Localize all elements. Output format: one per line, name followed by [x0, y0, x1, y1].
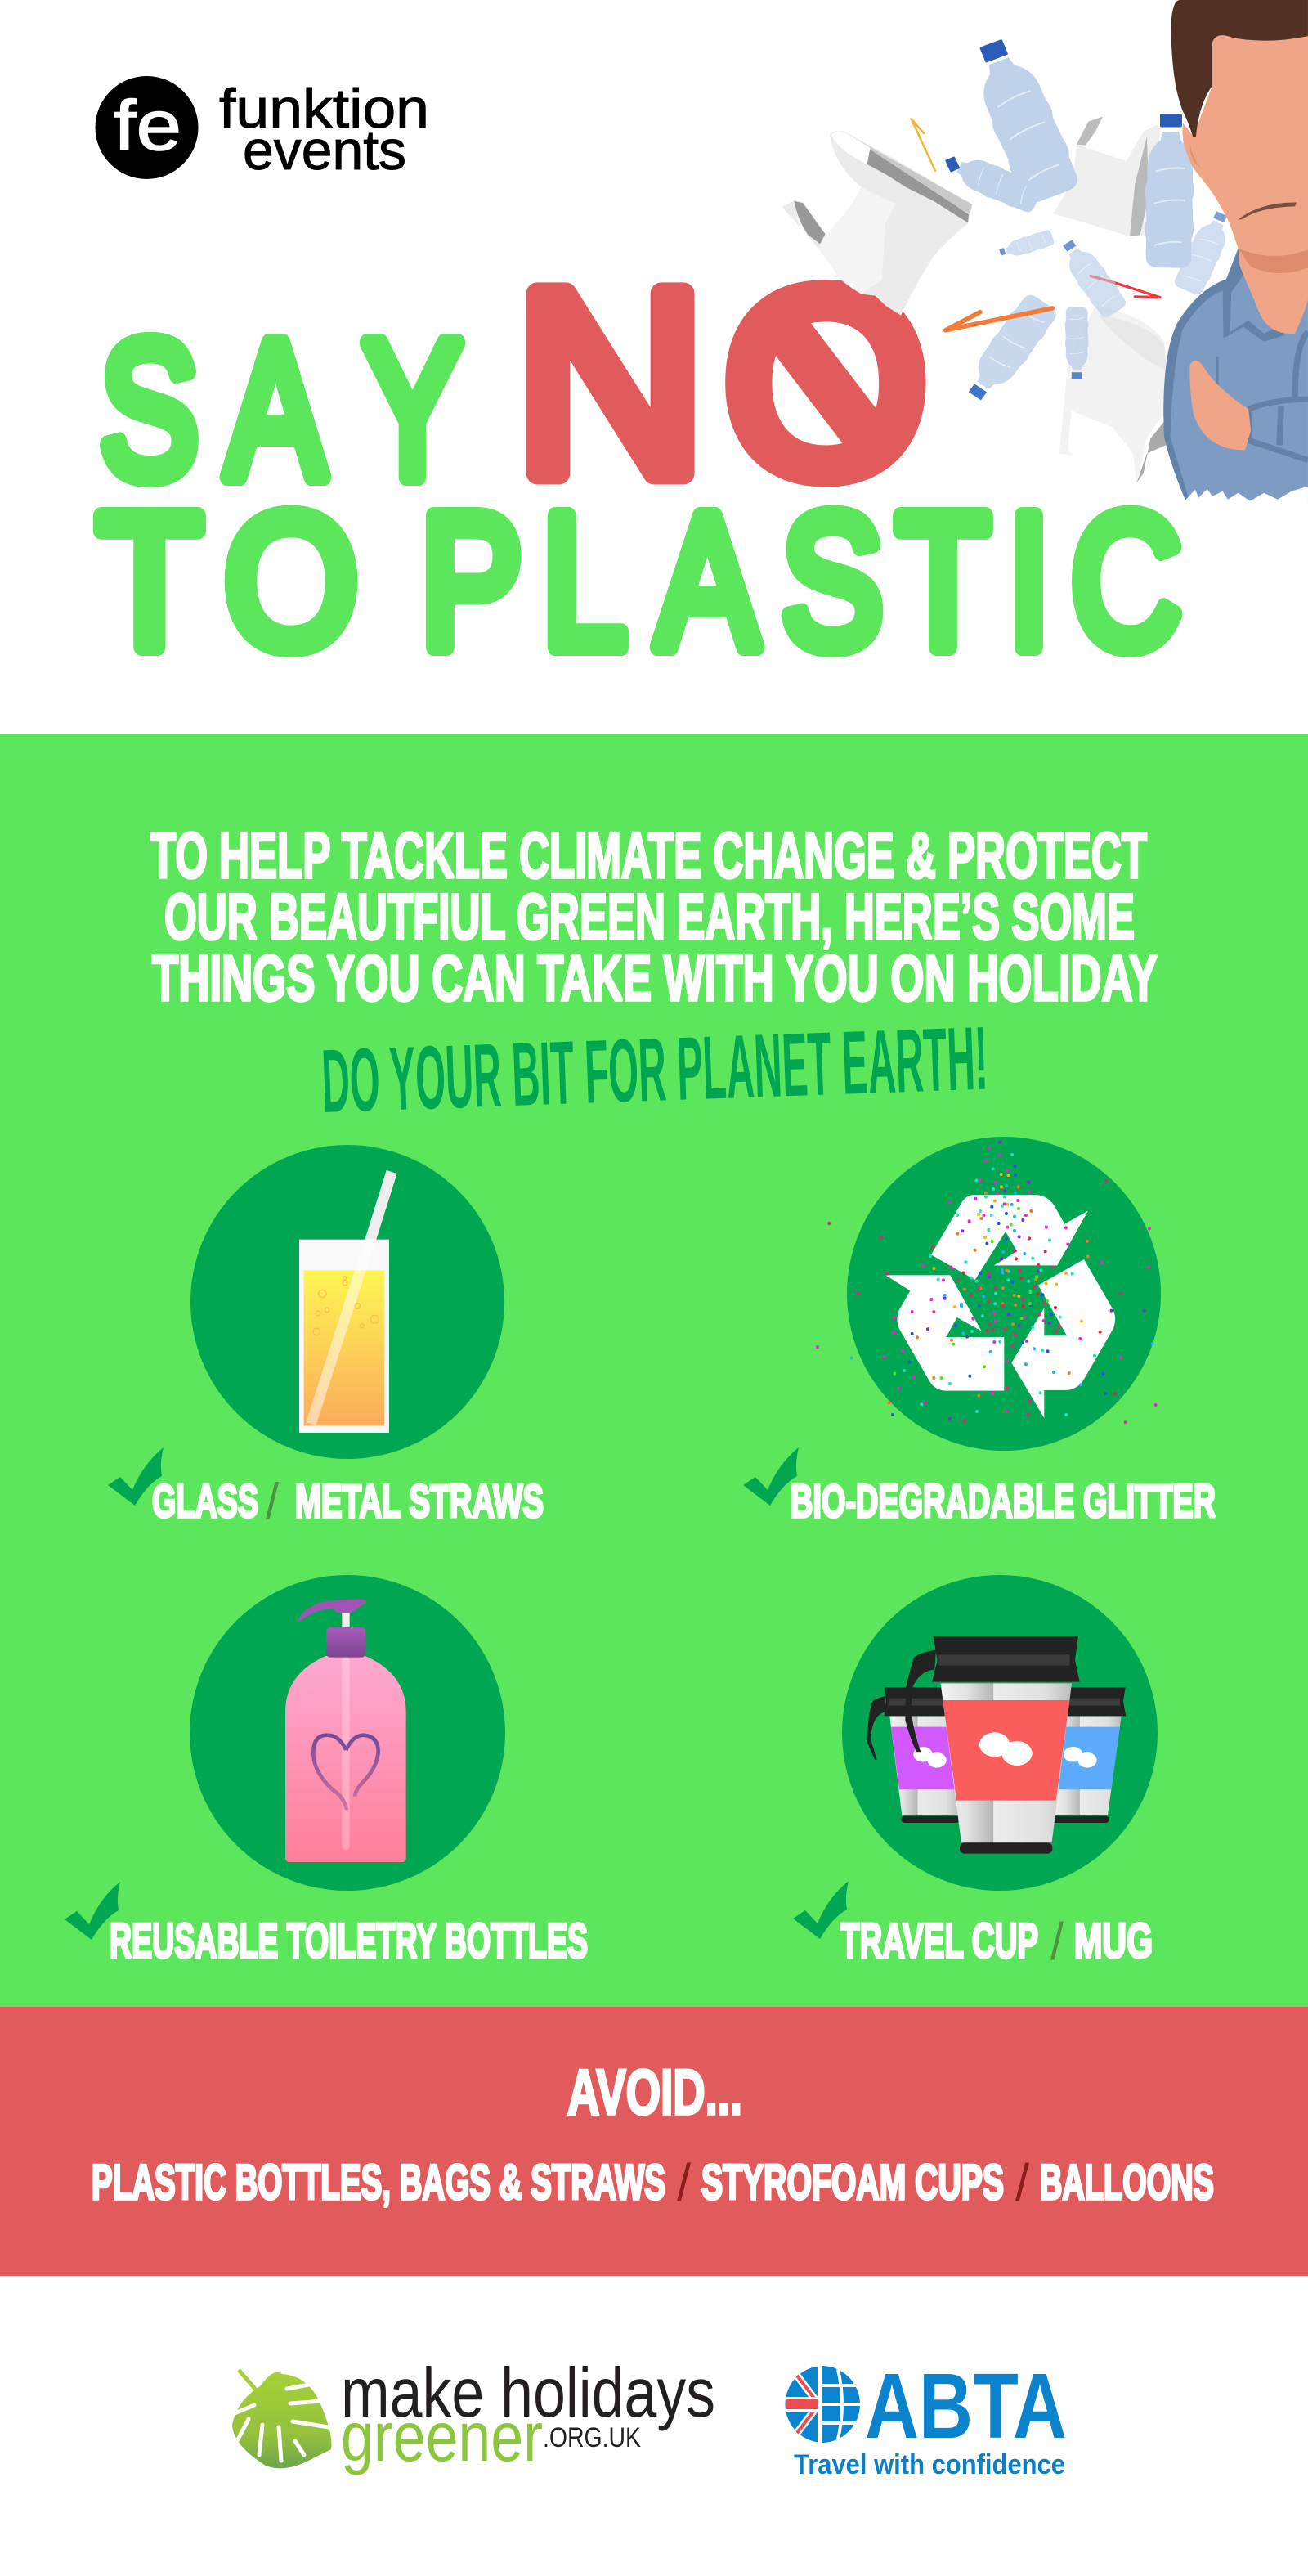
logo: funktion events: fe — [114, 87, 181, 165]
icon: recycling arrows with glitter — [818, 1142, 1156, 1422]
title word: to: TO — [97, 475, 357, 687]
icon: circle background — [842, 1575, 1158, 1891]
plastic straws — [912, 119, 1160, 330]
label: TRAVEL CUP — [840, 1914, 1038, 1968]
label: GLASS — [152, 1475, 258, 1528]
logo: funktion events: funktion — [219, 78, 429, 140]
icon: monstera leaf — [232, 2370, 331, 2468]
icon: flag globe — [785, 2366, 862, 2443]
label: MUG — [1074, 1914, 1153, 1968]
label: METAL STRAWS — [295, 1475, 544, 1528]
man: face and neck — [1182, 35, 1308, 334]
avoid list: / — [677, 2153, 691, 2212]
label: / — [266, 1474, 280, 1530]
item: reusable toiletry bottles — [65, 1575, 588, 1968]
plastic bottles — [945, 39, 1233, 400]
logo: make holidays greener: .ORG.UK — [543, 2422, 641, 2453]
icon: pump bottle with heart — [285, 1600, 406, 1862]
logo: make holidays greener: make holidays — [341, 2354, 715, 2432]
icon: glass with straw — [299, 1170, 397, 1433]
label: / — [1050, 1912, 1064, 1971]
logo: make holidays greener: greener — [341, 2399, 543, 2476]
brush edge — [1178, 487, 1308, 515]
avoid list: STYROFOAM CUPS — [701, 2155, 1004, 2210]
right mug — [1052, 1687, 1126, 1823]
avoid list: / — [1015, 2153, 1029, 2212]
logo: abta — [785, 2354, 1067, 2480]
left mug — [867, 1687, 960, 1823]
title word: no with prohibition slash: NO — [516, 236, 927, 529]
logo: abta: ABTA — [865, 2354, 1067, 2457]
logo: funktion events — [95, 76, 429, 182]
title: say no to plastic — [97, 236, 1181, 688]
logo: make holidays greener — [232, 2354, 715, 2476]
heading: intro text — [150, 819, 1158, 1014]
item: glass and metal straws — [108, 1145, 544, 1530]
man: hand — [1189, 361, 1251, 450]
icon: check mark — [743, 1447, 799, 1506]
man: hair — [1171, 0, 1308, 137]
icon: check mark — [65, 1882, 120, 1940]
avoid list: PLASTIC BOTTLES, BAGS & STRAWS — [92, 2155, 665, 2210]
icon: check mark — [793, 1881, 849, 1939]
avoid list: BALLOONS — [1040, 2155, 1214, 2210]
avoid heading: AVOID... — [567, 2056, 742, 2128]
panel: avoid — [0, 2007, 1308, 2276]
title word: plastic: PLASTIC — [420, 474, 1181, 688]
logo: abta: Travel with confidence — [794, 2449, 1065, 2480]
icon: circle background — [847, 1137, 1161, 1451]
item: travel cup and mug — [793, 1575, 1158, 1971]
title word: say: SAY — [100, 301, 462, 518]
label — [152, 1474, 544, 1530]
item: bio-degradable glitter — [743, 1137, 1216, 1528]
icon: circle background — [190, 1575, 505, 1891]
icon: three travel mugs — [867, 1636, 1126, 1854]
logo: funktion events: events — [243, 119, 406, 182]
plastic bag: left — [782, 131, 972, 316]
plastic bag: upper right — [1052, 117, 1161, 236]
plastic bag: lower right — [1059, 306, 1169, 485]
center mug — [905, 1636, 1080, 1854]
man: shirt — [1163, 248, 1308, 503]
icon: circle background — [190, 1145, 504, 1459]
panel: green section — [0, 734, 1308, 2007]
illustration: man refusing plastic — [782, 0, 1308, 515]
label: REUSABLE TOILETRY BOTTLES — [110, 1914, 588, 1968]
icon: check mark — [108, 1447, 164, 1506]
